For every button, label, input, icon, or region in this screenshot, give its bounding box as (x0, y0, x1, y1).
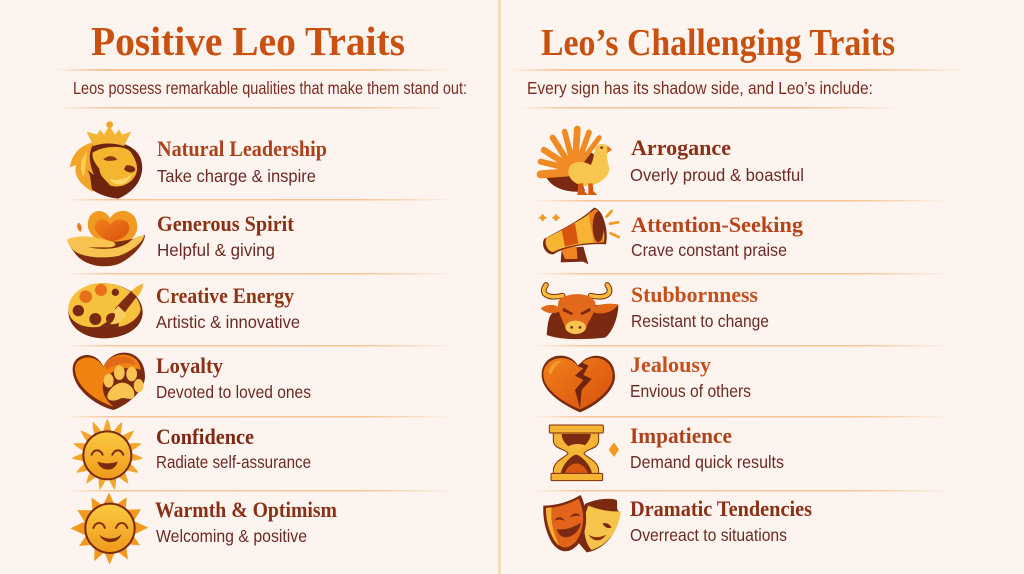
icon: heart with paw (73, 353, 145, 410)
heading: Leo's Challenging Traits: Leo’s Challenging Traits (541, 22, 895, 64)
icon: proud peacock (541, 129, 612, 195)
intro text: positive traits: Leos possess remarkable qualities that make them stand out: (73, 78, 467, 98)
heading: Stubbornness (631, 282, 758, 307)
icon: paint palette (68, 283, 143, 338)
trait: Natural Leadership (70, 121, 327, 199)
heading: Jealousy (630, 352, 711, 377)
trait: Stubbornness (541, 282, 769, 339)
panel: positive traits (67, 18, 467, 565)
description: Radiate self-assurance (156, 452, 311, 472)
icon: smiling sun (71, 419, 144, 491)
icon: megaphone (538, 208, 619, 264)
heading: Positive Leo Traits: Positive Leo Traits (91, 18, 405, 64)
heading: Loyalty (156, 353, 223, 378)
trait: Attention-Seeking (538, 208, 803, 264)
description: Take charge & inspire (157, 166, 316, 186)
heading: Impatience (630, 423, 732, 448)
heading: Confidence (156, 424, 254, 449)
description: Welcoming & positive (156, 526, 307, 546)
panel: challenging traits (527, 22, 895, 552)
heading: Warmth & Optimism (155, 497, 337, 522)
icon: angry bull (541, 285, 618, 339)
description: Crave constant praise (631, 240, 787, 260)
heading: Dramatic Tendencies (630, 496, 812, 521)
trait: Impatience (549, 423, 784, 481)
description: Artistic & innovative (156, 312, 300, 332)
description: Envious of others (630, 381, 751, 401)
trait: Confidence (71, 419, 311, 491)
trait: Warmth & Optimism (70, 493, 337, 565)
heading: Creative Energy (156, 283, 294, 308)
intro text: challenging traits: Every sign has its shadow side, and Leo’s include: (527, 78, 873, 98)
trait: Jealousy (542, 352, 751, 412)
heading: Arrogance (631, 135, 731, 160)
icon: broken heart (542, 356, 615, 412)
heading: Attention-Seeking (631, 212, 803, 237)
heading: Generous Spirit (157, 211, 295, 236)
icon: heart in hand (67, 211, 145, 266)
trait: Creative Energy (68, 283, 300, 338)
icon: crowned lion (70, 121, 142, 199)
description: Resistant to change (631, 311, 769, 331)
icon: hourglass (549, 425, 619, 481)
description: Overly proud & boastful (630, 165, 804, 185)
description: Overreact to situations (630, 525, 787, 545)
trait: Loyalty (73, 353, 311, 410)
trait: Generous Spirit (67, 211, 295, 266)
trait: Arrogance (541, 129, 804, 195)
icon: theater masks (543, 495, 621, 552)
description: Demand quick results (630, 452, 784, 472)
trait: Dramatic Tendencies (543, 495, 812, 552)
description: Devoted to loved ones (156, 382, 311, 402)
heading: Natural Leadership (157, 136, 327, 161)
icon: radiant sun (70, 493, 148, 565)
description: Helpful & giving (157, 240, 275, 260)
